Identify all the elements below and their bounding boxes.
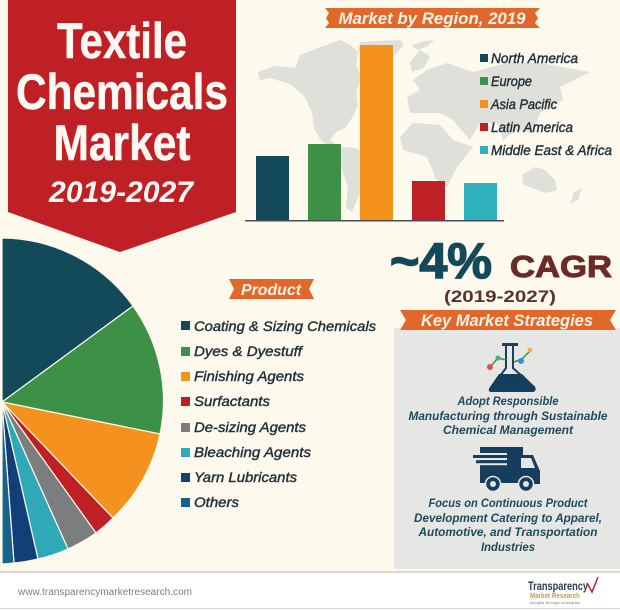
legend: product: Others	[194, 494, 239, 510]
legend: region: North America	[491, 50, 578, 66]
icon: flask	[487, 343, 536, 391]
panel: key market strategies	[394, 328, 620, 569]
website url: www.transparencymarketresearch.com	[17, 587, 192, 598]
legend: region: Middle East & Africa	[491, 142, 612, 158]
ribbon: product: Product	[241, 282, 302, 299]
strategy text 2: Focus on Continuous Product	[428, 498, 589, 510]
pie chart: product	[2, 238, 163, 564]
strategy text 1: Manufacturing through Sustainable	[408, 411, 608, 423]
legend: product: Dyes & Dyestuff	[194, 343, 304, 359]
strategy text 1: Chemical Management	[443, 425, 574, 437]
title text: Market	[54, 115, 191, 171]
legend: product: Coating & Sizing Chemicals	[194, 318, 376, 334]
strategy text 2: Industries	[481, 542, 535, 554]
logo: Transparency Market Research: Market Research	[530, 591, 580, 600]
legend: region	[480, 50, 612, 158]
legend: region: Latin America	[491, 119, 573, 135]
CAGR figure: (2019-2027)	[444, 287, 556, 306]
legend: product: Yarn Lubricants	[194, 469, 297, 485]
title text: Textile	[57, 13, 187, 69]
legend: product: Finishing Agents	[194, 368, 304, 384]
legend: region: Asia Pacific	[490, 96, 557, 112]
legend: region: Europe	[491, 73, 532, 89]
title banner	[8, 0, 236, 252]
legend: product: De-sizing Agents	[194, 419, 306, 435]
title text	[16, 13, 228, 171]
strategy text 2: Automotive, and Transportation	[417, 527, 598, 539]
CAGR figure: ~4%	[390, 233, 492, 289]
bar chart: market by region	[245, 45, 504, 222]
strategy text 1: Adopt Responsible	[457, 396, 559, 408]
world map background	[258, 40, 590, 212]
CAGR figure: CAGR	[510, 249, 612, 284]
strategy text 2	[414, 498, 602, 554]
legend: product	[181, 318, 376, 510]
ribbon: product	[229, 279, 314, 299]
icon: delivery truck	[470, 447, 540, 492]
logo: Transparency Market Research	[528, 577, 598, 605]
title text: Chemicals	[16, 64, 228, 120]
logo: Transparency Market Research: Insights through innovation	[530, 601, 580, 605]
strategy text 1	[408, 396, 608, 437]
ribbon: market by region: Market by Region, 2019	[338, 9, 526, 28]
footer	[0, 571, 620, 610]
title years: 2019-2027	[48, 176, 194, 209]
legend: product: Surfactants	[194, 393, 270, 409]
logo: Transparency Market Research: Transparency	[528, 581, 588, 593]
strategy text 2: Development Catering to Apparel,	[414, 513, 602, 525]
CAGR figure	[390, 233, 612, 306]
legend: product: Bleaching Agents	[194, 444, 311, 460]
ribbon: key market strategies: Key Market Strategies	[421, 311, 593, 330]
